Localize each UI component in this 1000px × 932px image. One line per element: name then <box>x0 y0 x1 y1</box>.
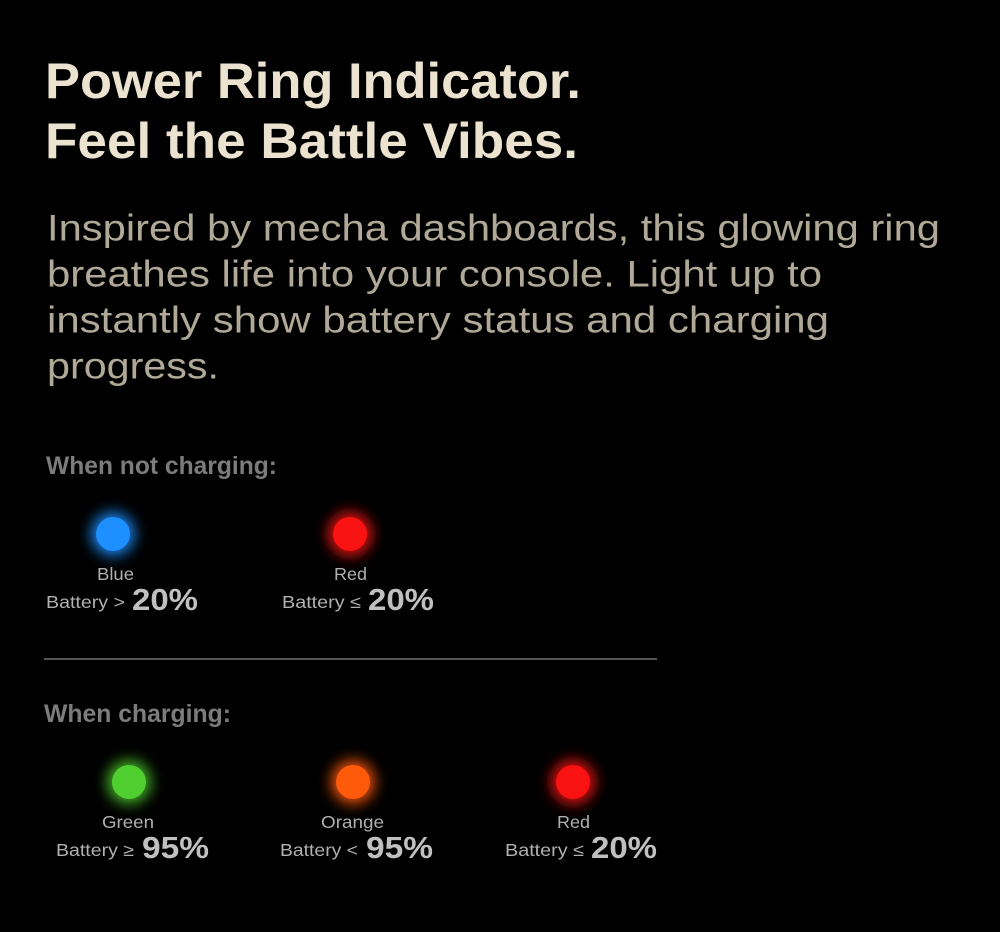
value: battery at or below 20% <box>505 830 657 865</box>
value: battery below 95% <box>280 830 433 865</box>
icon: red light <box>551 760 595 804</box>
description text: breathes life into your console. Light up to <box>47 254 822 294</box>
label: orange: Orange <box>321 812 384 832</box>
description text: instantly show battery status and charging <box>47 300 829 340</box>
divider <box>44 658 657 660</box>
label: red: Red <box>334 564 367 584</box>
value: battery at or below 20%: 20% <box>368 582 434 617</box>
status: green, battery at or above 95% <box>56 760 209 865</box>
value: battery at or below 20%: Battery ≤ <box>505 840 584 860</box>
status: red, battery at or below 20% <box>282 512 434 617</box>
heading: when charging: When charging: <box>44 700 231 728</box>
value: battery above 20%: Battery > <box>46 592 125 612</box>
value: battery at or above 95%: 95% <box>142 830 209 865</box>
value: battery at or below 20%: 20% <box>591 830 657 865</box>
value: battery above 20% <box>46 582 198 617</box>
icon: green light <box>107 760 151 804</box>
icon: orange light <box>331 760 375 804</box>
title: Power Ring Indicator. <box>45 53 581 109</box>
label: blue: Blue <box>97 564 134 584</box>
heading: when not charging: When not charging: <box>46 452 277 480</box>
title <box>45 53 581 169</box>
status: blue, battery above 20% <box>46 512 198 617</box>
value: battery below 95%: Battery < <box>280 840 358 860</box>
label: green: Green <box>102 812 154 832</box>
label: red: Red <box>557 812 590 832</box>
value: battery at or above 95%: Battery ≥ <box>56 840 134 860</box>
description text <box>47 208 940 386</box>
title: Feel the Battle Vibes. <box>45 113 578 169</box>
status: red while charging, battery at or below 20% <box>505 760 657 865</box>
icon: blue light <box>91 512 135 556</box>
description text: progress. <box>47 346 219 386</box>
value: battery at or below 20% <box>282 582 434 617</box>
value: battery at or above 95% <box>56 830 209 865</box>
value: battery below 95%: 95% <box>366 830 433 865</box>
status: orange, battery below 95% <box>280 760 433 865</box>
icon: red light <box>328 512 372 556</box>
value: battery above 20%: 20% <box>132 582 198 617</box>
description text: Inspired by mecha dashboards, this glowing ring <box>47 208 940 248</box>
value: battery at or below 20%: Battery ≤ <box>282 592 361 612</box>
